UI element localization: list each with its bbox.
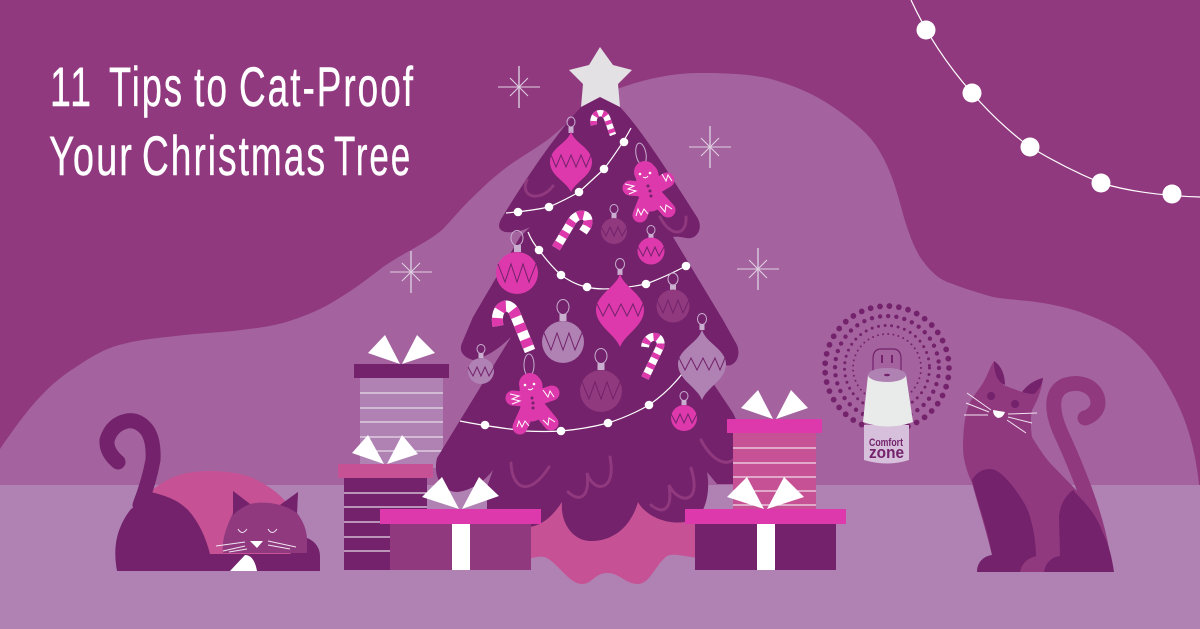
ornament: gingerbread man bottom xyxy=(510,354,555,427)
gift: light box with dark lid xyxy=(354,335,449,468)
title: Christmas xyxy=(142,124,327,187)
tree garlands xyxy=(460,128,690,435)
string of lights xyxy=(911,0,1200,204)
tree squiggles xyxy=(511,180,733,510)
ornament: light teardrop xyxy=(678,314,726,400)
ornament: pink teardrop top xyxy=(550,117,592,192)
scent dots rings xyxy=(825,306,949,430)
ornament: small pink ball low xyxy=(671,392,697,431)
comfort zone diffuser: zone xyxy=(869,443,904,462)
comfort zone diffuser xyxy=(863,368,913,464)
ornament: small candy cane xyxy=(594,113,613,135)
ornament: purple ball right xyxy=(656,273,690,322)
wall outlet xyxy=(873,349,901,374)
title: to xyxy=(194,55,229,118)
title: Cat-Proof xyxy=(239,55,415,118)
sitting cat xyxy=(963,361,1114,572)
title: Tips xyxy=(109,55,184,118)
ornament: large candy cane xyxy=(497,306,530,351)
ornament: right candy cane xyxy=(645,337,661,378)
ornament: purple ball low xyxy=(580,348,622,412)
ornament: large pink teardrop xyxy=(596,258,644,347)
tree star xyxy=(569,47,632,107)
gift: purple box with pink lid xyxy=(380,477,541,570)
ornament: light ball xyxy=(542,300,584,363)
title: 11 xyxy=(50,55,93,118)
title xyxy=(49,55,415,187)
ornament: large pink ball xyxy=(496,230,538,294)
gift: rose striped box with pink lid xyxy=(727,390,822,511)
ornament: small light ball xyxy=(468,344,494,384)
ornament: middle candy cane xyxy=(556,215,588,248)
sparkles xyxy=(390,66,779,293)
gift: dark striped box with rose lid xyxy=(338,435,433,570)
christmas tree xyxy=(436,97,750,541)
tree skirt xyxy=(531,500,700,584)
comfort zone diffuser: Comfort xyxy=(869,437,903,449)
title: Your xyxy=(49,124,134,187)
title: Tree xyxy=(334,124,412,187)
gift: dark box with pink lid xyxy=(685,477,846,570)
ornament: gingerbread man top xyxy=(625,142,672,216)
ornament: small pink ball xyxy=(638,226,664,264)
ornament: purple ball top xyxy=(601,204,627,244)
sleeping cat xyxy=(107,421,320,571)
floor xyxy=(0,485,1200,629)
